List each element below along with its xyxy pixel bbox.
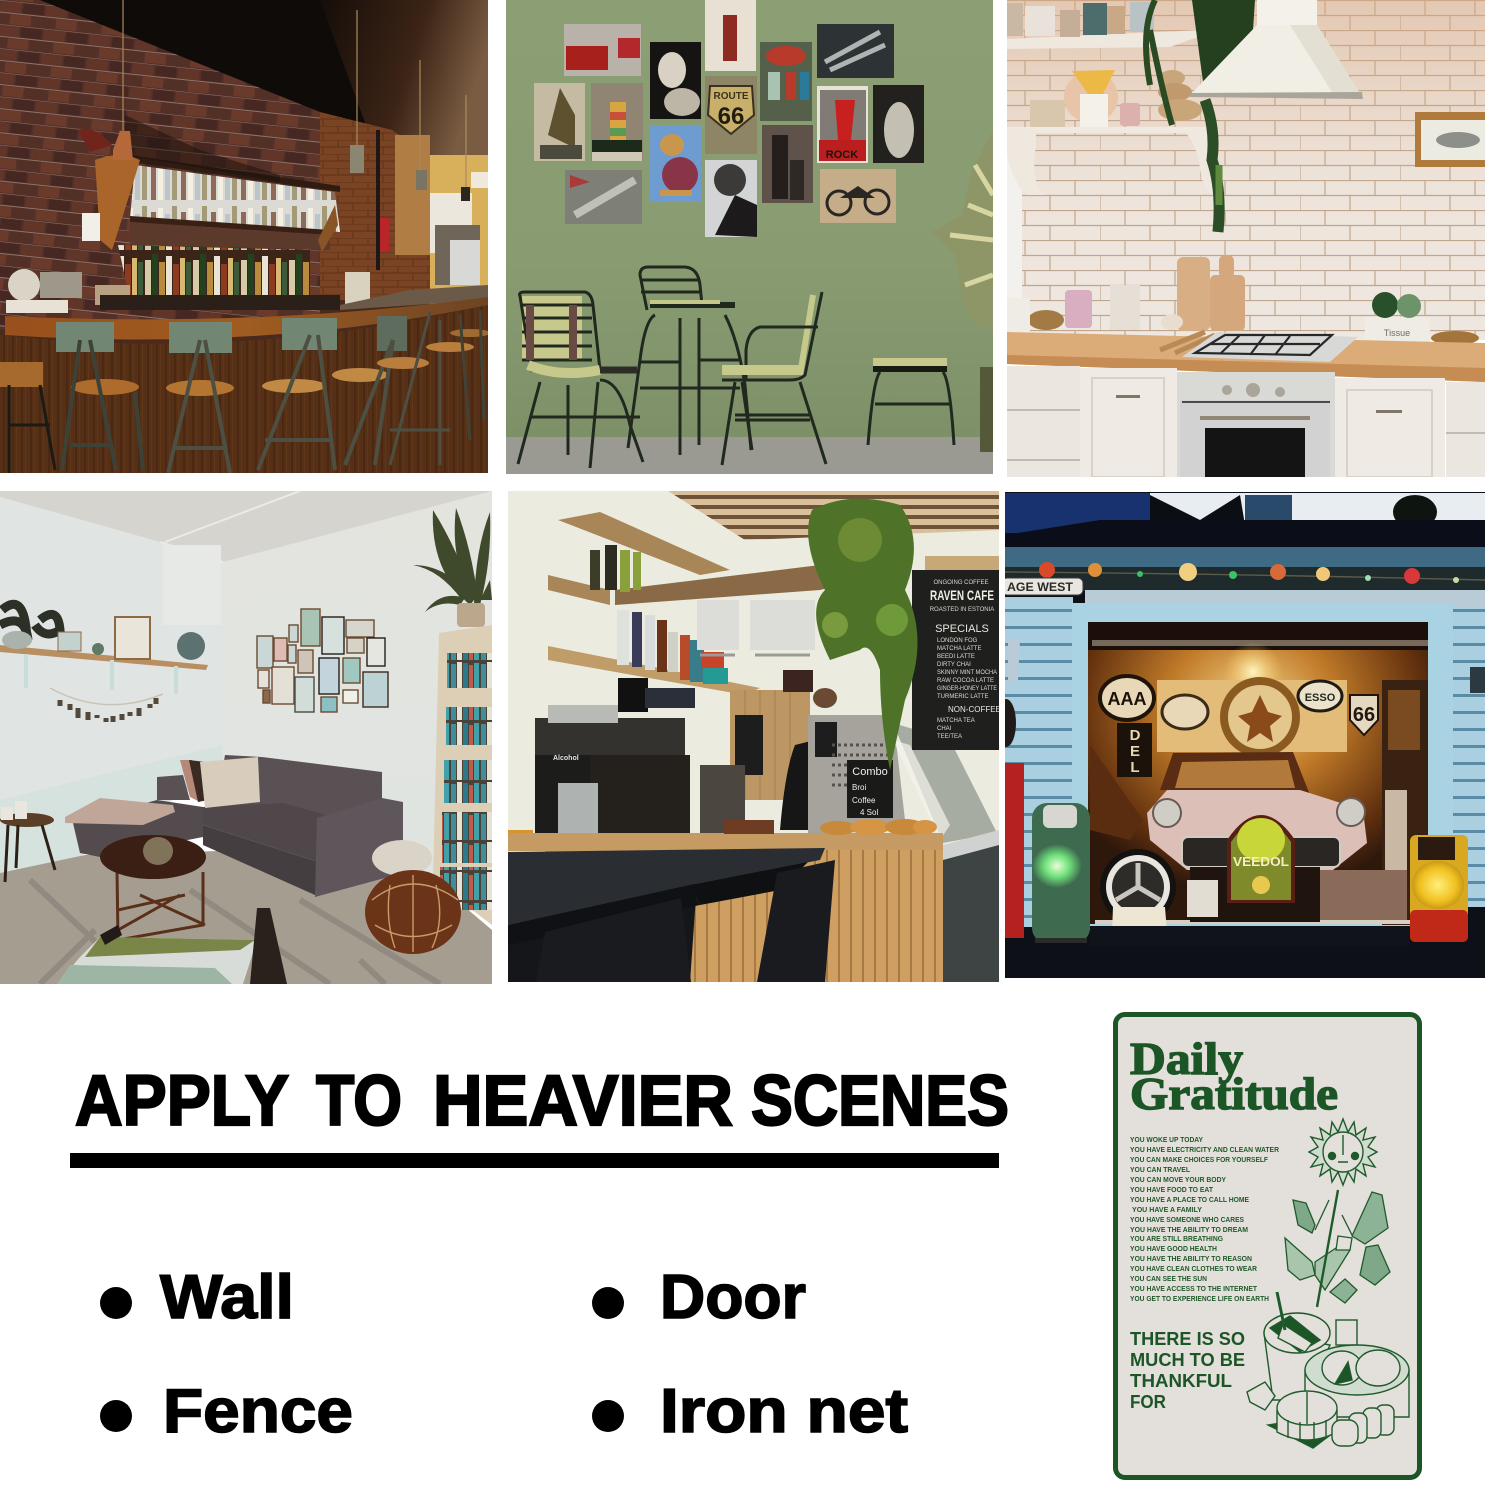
cafe menu chalkboard: TURMERIC LATTE bbox=[937, 694, 989, 700]
pendant lamps bbox=[113, 0, 488, 201]
photo: living room with gallery wall bbox=[0, 491, 492, 984]
spare tire bbox=[1100, 849, 1176, 933]
garage wall signs: E bbox=[1130, 743, 1140, 760]
heading text: APPLY bbox=[75, 1062, 289, 1141]
gratitude list: YOU WOKE UP TODAY bbox=[1130, 1137, 1203, 1144]
coffee machine bbox=[535, 678, 763, 850]
wooden shelves with bottles bbox=[548, 512, 900, 695]
icon: smiling sun bbox=[1309, 1119, 1377, 1185]
bullet list: scenes bbox=[100, 1263, 908, 1446]
cafe menu chalkboard: MATCHA LATTE bbox=[937, 646, 981, 652]
cafe menu chalkboard: NON-COFFEE bbox=[948, 705, 1001, 714]
garage interior scene bbox=[1088, 622, 1428, 925]
grey sofa bbox=[65, 755, 403, 897]
photo: green wall with metal signs and chairs bbox=[506, 0, 993, 474]
combo chalkboard: 4 Sol bbox=[860, 808, 878, 817]
icon: mooncake bbox=[1268, 1391, 1337, 1448]
yellow and red barrel bbox=[1410, 835, 1468, 942]
icon: butterflies and stem bbox=[1285, 1190, 1390, 1307]
combo chalkboard: Coffee bbox=[852, 796, 876, 805]
cafe menu chalkboard: DIRTY CHAI bbox=[937, 662, 971, 668]
potted plant bbox=[932, 130, 993, 452]
photo: cafe counter bbox=[508, 491, 1001, 982]
upper shelves with dishes bbox=[1007, 2, 1215, 195]
cafe menu chalkboard: ROASTED IN ESTONIA bbox=[930, 607, 994, 613]
stool bbox=[868, 358, 954, 445]
poster closing message: THANKFUL bbox=[1130, 1371, 1232, 1391]
poster closing message: THERE IS SO bbox=[1130, 1329, 1245, 1349]
heading text bbox=[75, 1062, 1009, 1141]
gratitude list: YOU HAVE ELECTRICITY AND CLEAN WATER bbox=[1130, 1147, 1279, 1154]
list item: fence: Fence bbox=[163, 1377, 353, 1446]
icon: bamboo steamer with buns bbox=[1305, 1345, 1409, 1417]
left wall signs and red pump bbox=[996, 640, 1024, 938]
wall of tin signs: ROUTE bbox=[714, 91, 749, 102]
garage wall signs: AAA bbox=[1108, 689, 1146, 709]
cafe menu chalkboard: SPECIALS bbox=[935, 623, 989, 635]
cafe menu chalkboard: CHAI bbox=[937, 726, 952, 732]
oven bbox=[1177, 372, 1335, 477]
hanging wine glasses bbox=[697, 600, 815, 655]
gratitude list: YOU CAN TRAVEL bbox=[1130, 1167, 1191, 1174]
wall shelf with decor bbox=[0, 604, 208, 694]
photo: garage door mural bbox=[996, 492, 1485, 978]
photo: white brick kitchen bbox=[1007, 0, 1485, 477]
driveway ground bbox=[1005, 943, 1485, 978]
list item: wall bbox=[100, 1263, 294, 1332]
pastries on counter bbox=[724, 819, 937, 835]
poster title bbox=[1130, 1033, 1338, 1119]
coffee machine: Alcohol bbox=[553, 755, 579, 762]
garage frame bbox=[1072, 603, 1453, 930]
cafe menu chalkboard: TEE/TEA bbox=[937, 734, 962, 740]
cabinets bbox=[1007, 366, 1485, 477]
poster closing message bbox=[1130, 1329, 1245, 1412]
garage wall signs: ESSO bbox=[1305, 692, 1336, 704]
cafe menu chalkboard: RAVEN CAFE bbox=[930, 587, 994, 603]
gratitude list: YOU ARE STILL BREATHING bbox=[1130, 1236, 1224, 1243]
section heading bbox=[70, 1062, 1009, 1168]
range hood bbox=[1190, 0, 1363, 99]
gratitude list: YOU HAVE CLEAN CLOTHES TO WEAR bbox=[1130, 1266, 1257, 1273]
gratitude list: YOU HAVE THE ABILITY TO REASON bbox=[1130, 1256, 1252, 1263]
gratitude list: YOU HAVE FOOD TO EAT bbox=[1130, 1187, 1214, 1194]
list item: door bbox=[592, 1263, 806, 1332]
wall of tin signs: 66 bbox=[718, 103, 744, 130]
potted palm bbox=[413, 508, 492, 627]
wall picture bbox=[1415, 112, 1485, 167]
gallery wall frames bbox=[257, 609, 388, 712]
poster title: Gratitude bbox=[1130, 1068, 1338, 1119]
fridge edge bbox=[1007, 150, 1022, 300]
gratitude list: YOU GET TO EXPERIENCE LIFE ON EARTH bbox=[1130, 1296, 1269, 1303]
bucket bbox=[1187, 880, 1218, 917]
cafe menu chalkboard: SKINNY MINT MOCHA bbox=[937, 670, 997, 676]
gratitude list: YOU HAVE GOOD HEALTH bbox=[1130, 1246, 1217, 1253]
foreground cushions bbox=[57, 908, 287, 984]
cafe menu chalkboard: ONGOING COFFEE bbox=[933, 580, 989, 586]
cafe menu chalkboard: LONDON FOG bbox=[937, 638, 978, 644]
moon phase garland bbox=[50, 688, 163, 722]
wood panel and server bbox=[730, 670, 837, 830]
cafe menu chalkboard bbox=[912, 556, 1001, 750]
pastry case bbox=[808, 715, 999, 982]
list item: wall: Wall bbox=[160, 1263, 294, 1332]
wooden side shields bbox=[95, 155, 140, 250]
dark table bbox=[508, 848, 825, 982]
gratitude list: YOU CAN SEE THE SUN bbox=[1130, 1276, 1207, 1283]
bar stools bbox=[0, 310, 490, 473]
christmas lights string bbox=[1005, 562, 1485, 584]
side table with candles bbox=[0, 801, 55, 882]
bar counter bbox=[0, 297, 488, 473]
veedol oil sign: VEEDOL bbox=[1233, 854, 1289, 869]
cafe menu chalkboard: MATCHA TEA bbox=[937, 718, 975, 724]
gas hob bbox=[1182, 332, 1358, 362]
vintage pink car bbox=[1147, 752, 1367, 922]
black chairs bbox=[536, 860, 835, 982]
gratitude list: YOU HAVE A FAMILY bbox=[1132, 1207, 1202, 1214]
wall of tin signs bbox=[534, 0, 924, 237]
poster closing message: FOR bbox=[1130, 1392, 1166, 1412]
poster closing message: MUCH TO BE bbox=[1130, 1350, 1245, 1370]
hanging plant bbox=[808, 499, 918, 770]
hanging vine bbox=[1146, 0, 1255, 232]
glass jar on counter bbox=[508, 783, 607, 872]
tall bar chair bbox=[628, 267, 751, 455]
garage wall signs: D bbox=[1130, 727, 1141, 744]
list item: iron net: Iron net bbox=[660, 1377, 908, 1446]
counter items bbox=[1007, 285, 1479, 347]
cutting boards bbox=[1177, 255, 1245, 331]
combo chalkboard bbox=[847, 760, 893, 818]
rug bbox=[0, 850, 492, 984]
age sign on house: AGE WEST bbox=[1007, 580, 1074, 594]
cafe menu chalkboard: GINGER-HONEY LATTE bbox=[937, 686, 997, 692]
house siding bbox=[1005, 597, 1485, 927]
combo chalkboard: Broi bbox=[852, 783, 866, 792]
poster title: Daily bbox=[1130, 1033, 1243, 1084]
icon: sushi rolls bbox=[1332, 1405, 1394, 1446]
cafe menu chalkboard: RAW COCOA LATTE bbox=[937, 678, 994, 684]
cafe menu chalkboard: BEEDI LATTE bbox=[937, 654, 975, 660]
wooden countertop bbox=[1007, 332, 1485, 382]
photo: brick wall bar with stools bbox=[0, 0, 490, 473]
age sign on house bbox=[1002, 578, 1083, 595]
round coffee table bbox=[100, 835, 206, 940]
heading text: HEAVIER bbox=[433, 1062, 733, 1141]
list item: door: Door bbox=[660, 1263, 806, 1332]
gratitude list bbox=[1130, 1137, 1279, 1303]
wall of tin signs: ROCK bbox=[826, 149, 858, 161]
gratitude list: YOU CAN MAKE CHOICES FOR YOURSELF bbox=[1130, 1157, 1269, 1164]
product poster: daily gratitude bbox=[1114, 1013, 1421, 1479]
icon: bubble tea cup bbox=[1247, 1292, 1357, 1410]
dusk sky and trees bbox=[1005, 493, 1485, 533]
heading text: SCENES bbox=[751, 1062, 1009, 1141]
garage wall signs: L bbox=[1130, 759, 1140, 776]
gratitude list: YOU HAVE ACCESS TO THE INTERNET bbox=[1130, 1286, 1258, 1293]
veedol oil sign bbox=[1227, 815, 1295, 903]
combo chalkboard: Combo bbox=[852, 766, 888, 778]
woven basket and pouf bbox=[365, 840, 461, 954]
heading text: TO bbox=[316, 1062, 402, 1141]
green trash can bbox=[1032, 803, 1090, 946]
gratitude list: YOU HAVE A PLACE TO CALL HOME bbox=[1130, 1197, 1249, 1204]
counter items: Tissue bbox=[1384, 328, 1410, 338]
bookcase bbox=[433, 625, 492, 925]
gratitude list: YOU HAVE SOMEONE WHO CARES bbox=[1130, 1217, 1244, 1224]
slatted counter bbox=[508, 833, 943, 982]
left chair bbox=[518, 292, 643, 468]
gratitude list: YOU CAN MOVE YOUR BODY bbox=[1130, 1177, 1226, 1184]
antique scale bbox=[6, 269, 82, 313]
rolling pins bbox=[1160, 332, 1215, 353]
right armchair bbox=[722, 292, 826, 465]
garage wall signs: 66 bbox=[1353, 704, 1375, 726]
bar shelf with illuminated bottles bbox=[118, 115, 340, 300]
garage wall signs bbox=[1100, 676, 1378, 777]
gratitude list: YOU HAVE THE ABILITY TO DREAM bbox=[1130, 1227, 1248, 1234]
